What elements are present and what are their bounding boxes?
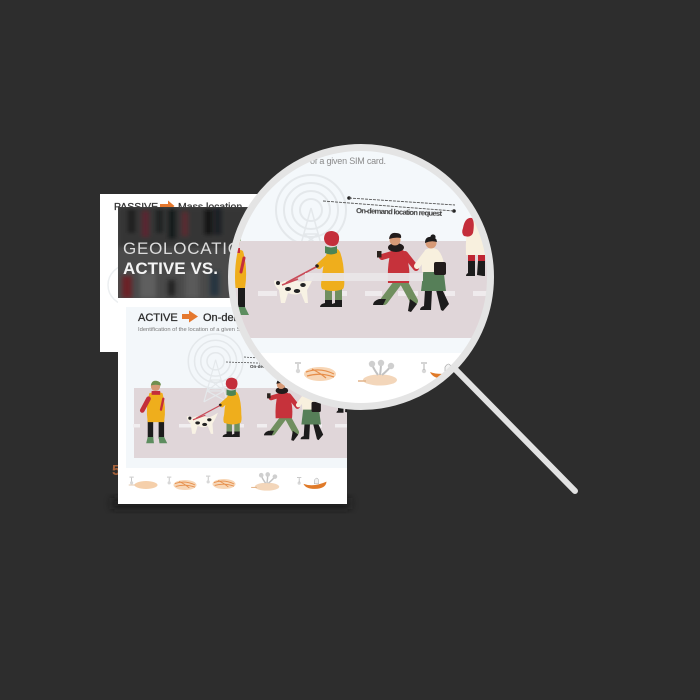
map icon 1 — [129, 477, 158, 489]
road markings — [133, 424, 347, 428]
title line one: GEOLOCATION — [123, 239, 254, 258]
location icon row — [129, 472, 327, 491]
lens person in white coat — [462, 218, 487, 276]
lens tower — [275, 174, 347, 241]
lens request label: On-demand location request — [356, 206, 443, 218]
drop shadow of stacked documents — [112, 498, 350, 509]
man in red coat — [264, 379, 298, 441]
title photo banner — [118, 207, 248, 298]
active heading: ACTIVE — [138, 312, 178, 324]
title line two: ACTIVE VS. — [123, 259, 218, 278]
magnifying glass handle — [456, 370, 575, 491]
active heading arrow — [182, 310, 198, 322]
passive document card — [100, 194, 280, 352]
right side shadow of document — [340, 398, 376, 404]
passive heading arrow — [160, 200, 174, 212]
magnifying glass lens — [217, 140, 500, 415]
people and tower scene — [142, 334, 353, 443]
tower — [188, 334, 243, 402]
full illustration canvas — [100, 144, 578, 512]
street band — [134, 388, 347, 458]
blurred crowd photo — [118, 207, 248, 298]
map icon 5 — [297, 477, 327, 489]
orange numeral fragment on dark card: 5 — [112, 462, 120, 479]
lens rim — [232, 148, 490, 406]
passive heading label: Mass location — [178, 201, 242, 213]
person in yellow coat — [142, 381, 167, 443]
lens glare strip — [305, 273, 423, 281]
person in white coat — [336, 408, 347, 413]
lens dog — [274, 276, 314, 303]
map icon 3 — [206, 476, 236, 489]
lens map icon 2 — [358, 360, 397, 386]
light scene panel — [126, 307, 347, 468]
active document card — [118, 298, 353, 504]
lens map icon 1 — [295, 363, 336, 381]
lens street band — [225, 241, 500, 338]
lens man in red coat — [373, 233, 417, 312]
dog — [187, 413, 218, 434]
request arrow — [226, 356, 260, 364]
woman with bag — [296, 396, 324, 440]
lens figures — [217, 218, 487, 315]
map icon 2 — [167, 477, 197, 490]
lens light panel — [241, 151, 472, 353]
lens description text: of a given SIM card. — [310, 156, 386, 166]
lens person in yellow coat — [235, 239, 249, 315]
lens request arrow — [323, 196, 456, 213]
faint tower rings on passive card — [108, 265, 148, 305]
lens dog walker — [286, 231, 344, 307]
passive heading: PASSIVE — [114, 201, 158, 213]
lens map icon 3 — [421, 363, 462, 379]
active heading label: On-demand — [203, 312, 261, 324]
lens road markings — [258, 291, 488, 296]
active description: Identification of the location of a given SIM card. — [138, 327, 262, 333]
request label: On-demand location request — [250, 364, 312, 369]
map icon 4 — [251, 472, 279, 491]
lens contents — [235, 151, 487, 403]
dog walker — [196, 378, 242, 437]
lens woman with bag — [417, 234, 449, 311]
